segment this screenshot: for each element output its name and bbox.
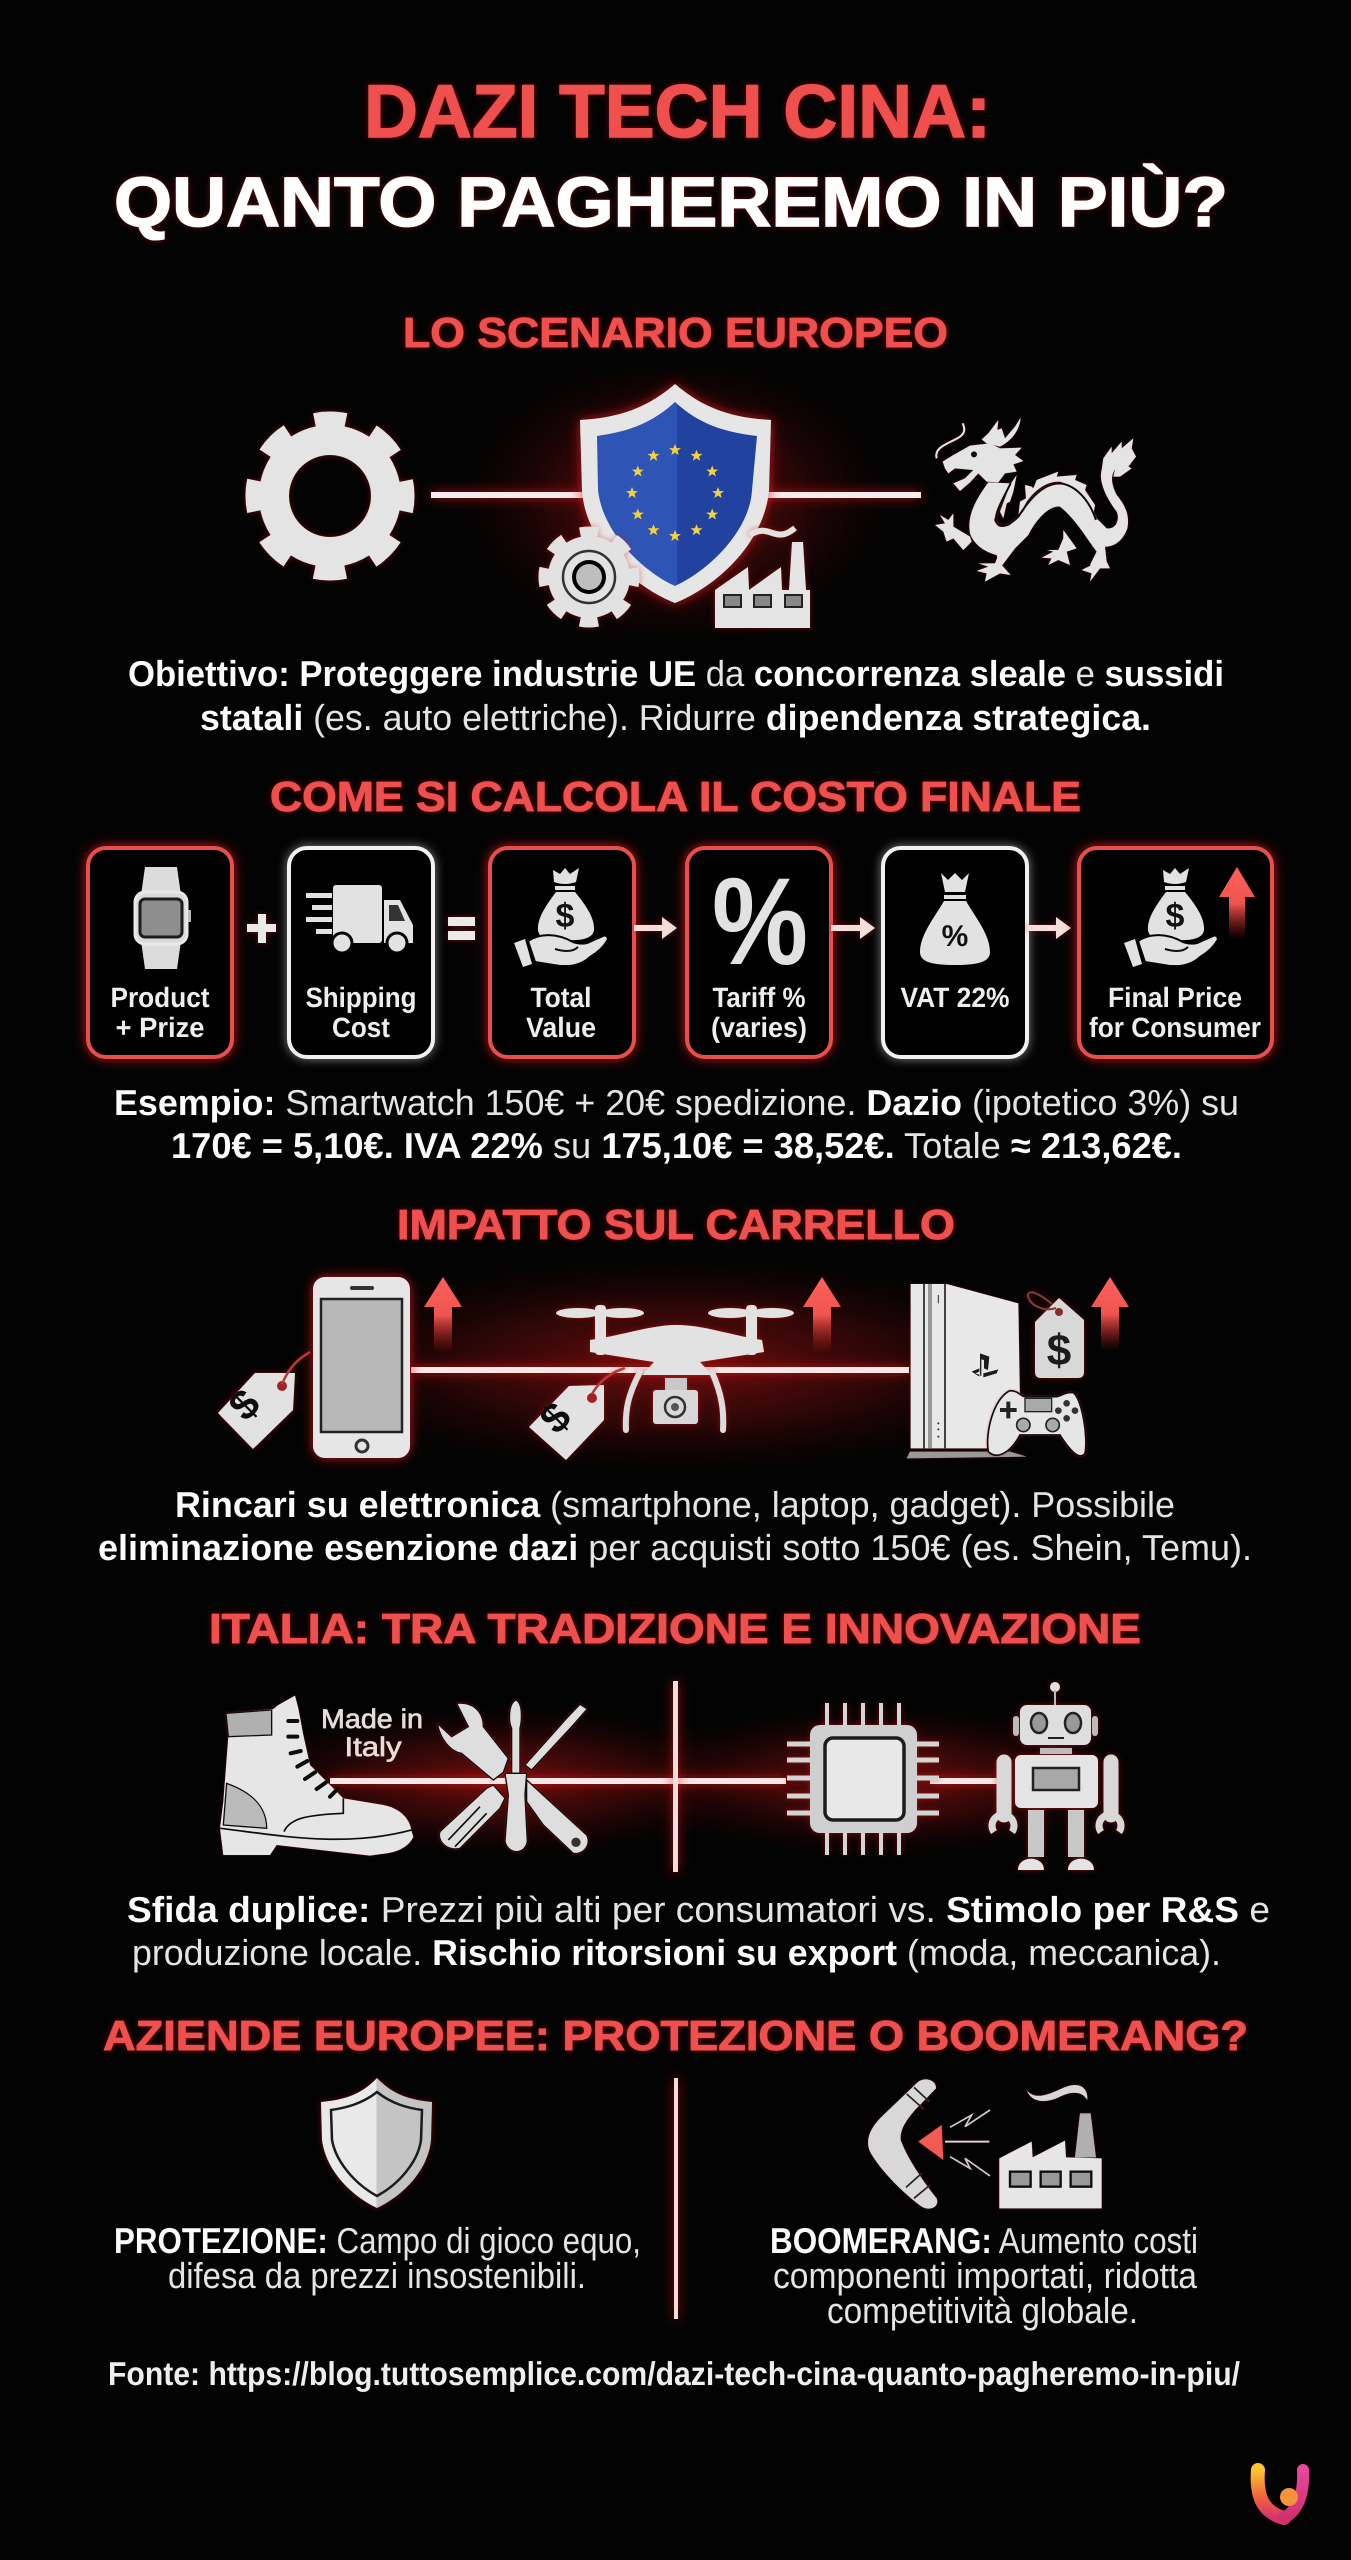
text block: competitività globale. xyxy=(827,2290,1138,2331)
icon: price tag: $ xyxy=(219,1380,269,1429)
icon: large gear xyxy=(254,420,406,572)
panel: protezione xyxy=(114,2078,641,2296)
panel: formula xyxy=(88,848,1272,1057)
box: VAT xyxy=(883,848,1027,1057)
icon: money bag with hand xyxy=(1124,868,1218,967)
text block: difesa da prezzi insostenibili. xyxy=(168,2255,586,2296)
title: QUANTO PAGHEREMO IN PIÙ? xyxy=(114,163,1228,241)
icon: up arrow xyxy=(1219,867,1255,940)
text block: PROTEZIONE: Campo di gioco equo, xyxy=(114,2220,641,2261)
icon: price tag xyxy=(218,1352,310,1449)
icon: price tag xyxy=(1028,1292,1084,1378)
icon: red arrow and sparks xyxy=(918,2110,990,2176)
arrow xyxy=(1027,917,1071,939)
box: total value xyxy=(490,848,634,1057)
icon: VAT bag: % xyxy=(942,920,968,953)
label: made in italy: Italy xyxy=(344,1732,402,1762)
icon: VAT bag xyxy=(920,873,990,965)
panel: scenario europeo illustration xyxy=(254,355,1136,645)
box: total value: Value xyxy=(526,1012,596,1043)
heading: lo scenario europeo: LO SCENARIO EUROPEO xyxy=(403,309,948,356)
heading: aziende europee: AZIENDE EUROPEE: PROTEZIONE O BOOMERANG? xyxy=(103,2012,1248,2059)
text block: rincari xyxy=(98,1484,1252,1568)
icon: drone xyxy=(556,1305,794,1430)
panel: italia illustration xyxy=(220,1681,1140,1872)
box: product + prize: + Prize xyxy=(116,1012,204,1043)
icon: factory xyxy=(999,2085,1102,2208)
arrow: up xyxy=(803,1277,841,1353)
text block: componenti importati, ridotta xyxy=(773,2255,1198,2296)
text block: rincari: eliminazione esenzione dazi per acquisti sotto 150€ (es. Shein, Temu). xyxy=(98,1527,1252,1568)
icon: money bag with hand: $ xyxy=(1166,897,1185,935)
icon: boomerang xyxy=(868,2079,937,2209)
title: DAZI TECH CINA: xyxy=(364,69,991,153)
icon: percent: % xyxy=(712,853,808,991)
icon: EU shield xyxy=(580,384,771,603)
box: tariff xyxy=(687,848,831,1057)
icon: price tag xyxy=(529,1368,625,1460)
arrow xyxy=(831,917,875,939)
icon: small gear xyxy=(544,532,634,622)
label: made in italy: Made in xyxy=(321,1704,423,1734)
text block: esempio xyxy=(114,1082,1239,1166)
icon: silver shield xyxy=(321,2078,432,2208)
connector line xyxy=(431,492,921,498)
arrow xyxy=(634,917,677,939)
panel: impatto illustration xyxy=(218,1255,1129,1475)
icon: microchip xyxy=(787,1703,939,1855)
text block: obiettivo: statali (es. auto elettriche). Ridurre dipendenza strategica. xyxy=(200,697,1151,738)
panel: boomerang xyxy=(770,2079,1198,2331)
box: tariff: Tariff % xyxy=(712,982,806,1013)
connector line xyxy=(411,1367,909,1373)
icon: smartphone xyxy=(313,1277,410,1458)
box: shipping cost xyxy=(289,848,433,1057)
text block: esempio: Esempio: Smartwatch 150€ + 20€ spedizione. Dazio (ipotetico 3%) su xyxy=(114,1082,1239,1123)
text block: BOOMERANG: Aumento costi xyxy=(770,2220,1198,2261)
icon: smartwatch xyxy=(135,867,191,969)
arrow: up xyxy=(424,1277,462,1353)
icon: boot xyxy=(220,1696,413,1856)
box: VAT: VAT 22% xyxy=(900,982,1010,1013)
text block xyxy=(770,2220,1198,2331)
icon: money bag with hand: $ xyxy=(556,897,575,935)
icon: robot xyxy=(992,1682,1121,1870)
label: made in italy xyxy=(321,1704,423,1762)
vertical divider xyxy=(673,1681,678,1872)
icon: dragon xyxy=(935,418,1136,582)
vertical divider xyxy=(674,2078,678,2319)
text block: sfida duplice xyxy=(127,1889,1270,1973)
text block xyxy=(114,2220,641,2296)
arrow: up xyxy=(1091,1277,1129,1351)
icon: truck xyxy=(306,885,413,953)
icon: price tag: $ xyxy=(530,1393,580,1442)
text block: rincari: Rincari su elettronica (smartphone, laptop, gadget). Possibile xyxy=(175,1484,1175,1525)
icon: price tag: $ xyxy=(1047,1326,1071,1375)
box: final price: for Consumer xyxy=(1089,1012,1261,1043)
box: final price: Final Price xyxy=(1108,982,1242,1013)
icon: game console xyxy=(907,1284,1027,1458)
symbol: plus xyxy=(247,914,276,943)
connector lines xyxy=(330,1778,786,1784)
icon: tools xyxy=(437,1700,588,1853)
text block: esempio: 170€ = 5,10€. IVA 22% su 175,10€ = 38,52€. Totale ≈ 213,62€. xyxy=(171,1125,1182,1166)
box: final price xyxy=(1079,848,1272,1057)
heading: italia: ITALIA: TRA TRADIZIONE E INNOVAZIONE xyxy=(209,1605,1141,1652)
icon: money bag with hand xyxy=(514,868,608,967)
box: total value: Total xyxy=(530,982,592,1013)
title xyxy=(114,69,1228,241)
text block: obiettivo: Obiettivo: Proteggere industrie UE da concorrenza sleale e sussidi xyxy=(128,653,1224,694)
source line: Fonte: https://blog.tuttosemplice.com/dazi-tech-cina-quanto-pagheremo-in-piu/ xyxy=(108,2355,1240,2392)
heading: come si calcola: COME SI CALCOLA IL COSTO FINALE xyxy=(270,773,1081,820)
box: shipping cost: Shipping xyxy=(306,982,416,1013)
icon: game controller xyxy=(988,1391,1086,1456)
heading: impatto sul carrello: IMPATTO SUL CARRELLO xyxy=(397,1201,955,1248)
text block: sfida duplice: produzione locale. Rischio ritorsioni su export (moda, meccanica). xyxy=(132,1932,1221,1973)
logo xyxy=(1258,2470,1303,2518)
text block: sfida duplice: Sfida duplice: Prezzi più alti per consumatori vs. Stimolo per R&S e xyxy=(127,1889,1270,1930)
box: product + prize: Product xyxy=(110,982,210,1013)
icon: factory xyxy=(715,528,810,628)
box: tariff: (varies) xyxy=(711,1012,807,1043)
symbol: equals xyxy=(448,917,475,940)
box: product + prize xyxy=(88,848,232,1057)
box: shipping cost: Cost xyxy=(332,1012,390,1043)
text block: obiettivo xyxy=(128,653,1224,738)
